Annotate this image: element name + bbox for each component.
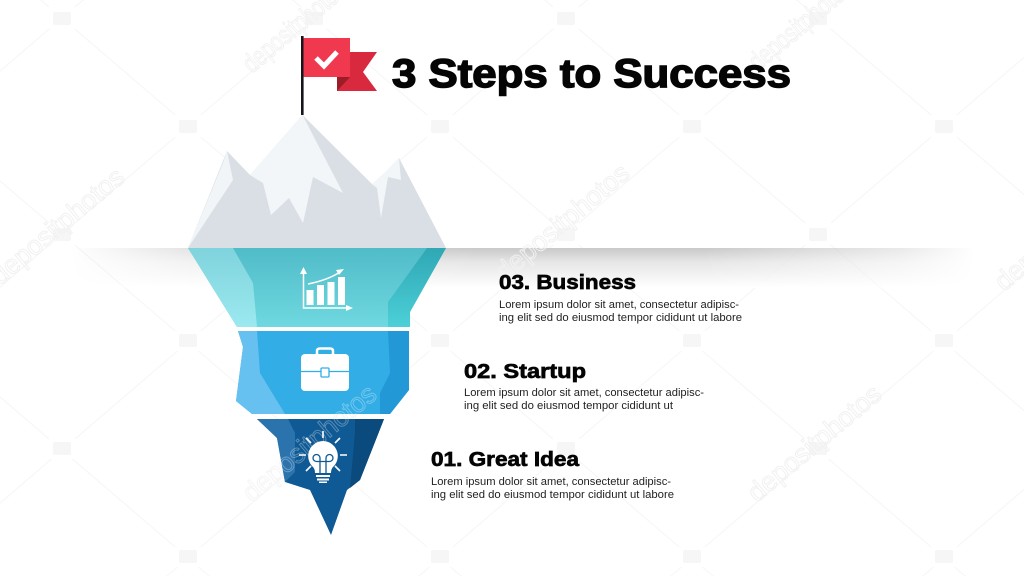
description: Lorem ipsum dolor sit amet, consectetur adipisc- bbox=[431, 476, 671, 488]
step 01 text bbox=[431, 448, 674, 501]
title: 3 Steps to Success bbox=[392, 52, 791, 96]
tier: startup (blue) bbox=[236, 331, 409, 414]
flag banner bbox=[304, 38, 350, 77]
icon: light bulb bbox=[299, 431, 347, 483]
flag pole bbox=[301, 36, 304, 115]
check mark bbox=[316, 52, 337, 66]
heading: 01. Great Idea bbox=[431, 448, 580, 471]
description: ing elit sed do eiusmod tempor cididunt ut bbox=[464, 400, 674, 412]
flag tail bbox=[337, 52, 377, 91]
flag bbox=[301, 36, 377, 115]
heading: 03. Business bbox=[499, 271, 636, 294]
tier: great idea (navy) bbox=[257, 419, 384, 535]
iceberg tip: snowy mountain bbox=[188, 115, 446, 248]
iceberg bbox=[188, 115, 446, 535]
watermark text: depositphotos bbox=[490, 158, 635, 287]
watermark over iceberg: depositphotos bbox=[237, 379, 382, 508]
description: Lorem ipsum dolor sit amet, consectetur adipisc- bbox=[499, 299, 739, 311]
watermark text: depositphotos bbox=[742, 379, 887, 508]
heading: 02. Startup bbox=[464, 360, 586, 383]
step 03 text bbox=[499, 271, 742, 324]
description: ing elit sed do eiusmod tempor cididunt ut labore bbox=[431, 489, 674, 501]
icon: briefcase bbox=[301, 348, 349, 391]
tier: business (teal) bbox=[188, 248, 446, 327]
description: Lorem ipsum dolor sit amet, consectetur adipisc- bbox=[464, 387, 704, 399]
description: ing elit sed do eiusmod tempor cididunt ut labore bbox=[499, 312, 742, 324]
icon: bar chart bbox=[300, 267, 353, 311]
step 02 text bbox=[464, 360, 704, 412]
water surface shadow bbox=[70, 248, 975, 288]
watermark text: depositphotos bbox=[237, 379, 382, 508]
